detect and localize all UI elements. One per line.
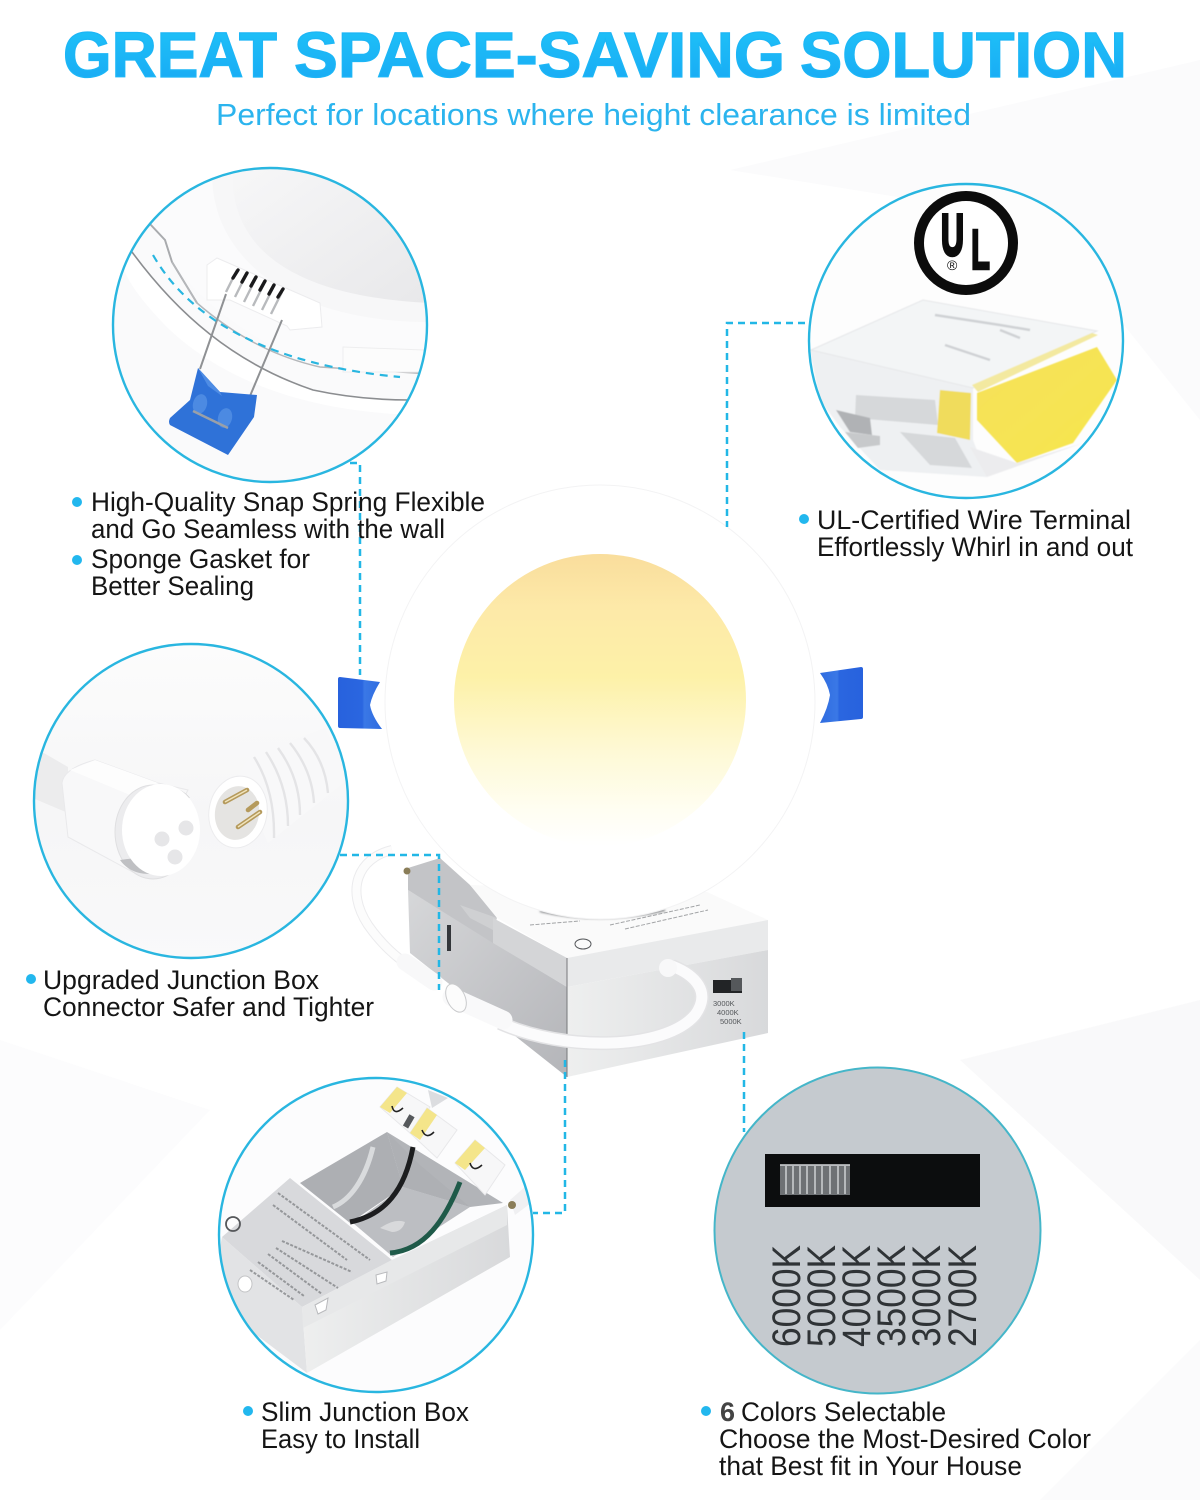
- dashed connector lines: [340, 323, 805, 1213]
- kelvin labels: 3000K: [905, 1245, 949, 1347]
- right plug: [208, 737, 329, 848]
- text block: UL wire terminal: UL-Certified Wire Terminal: [817, 505, 1131, 535]
- label printing: [250, 1193, 370, 1300]
- box faces: [222, 1178, 392, 1307]
- text block: snap spring and gasket: High-Quality Snap Spring Flexible: [91, 487, 485, 517]
- trim line: [132, 252, 410, 400]
- mounting block: [207, 258, 322, 330]
- text block: colours selectable: that Best fit in Your House: [719, 1451, 1022, 1481]
- thin cable: [356, 850, 412, 968]
- ring contact shadow: [540, 910, 665, 918]
- text block: UL wire terminal: Effortlessly Whirl in and out: [817, 532, 1133, 562]
- kelvin labels: 5000K: [800, 1245, 844, 1347]
- text block: snap spring and gasket: [72, 487, 485, 601]
- strips: [493, 918, 567, 987]
- title: SPACE-SAVING: [294, 19, 785, 91]
- panel: slim junction box: [210, 1075, 537, 1397]
- junction box with cable: 3000K: [713, 999, 735, 1008]
- panel: snap spring: [110, 165, 430, 485]
- connector cable: [500, 966, 702, 1043]
- text block: slim junction box: [243, 1397, 469, 1454]
- text block: UL wire terminal: [799, 505, 1133, 562]
- kelvin labels: 4000K: [835, 1245, 879, 1347]
- text block: colours selectable: 6: [720, 1397, 735, 1427]
- title: [63, 19, 1127, 91]
- text block: snap spring and gasket: Sponge Gasket for: [91, 544, 310, 574]
- UL logo: ®: [947, 257, 958, 273]
- wires: [333, 1147, 373, 1207]
- text block: slim junction box: Slim Junction Box: [261, 1397, 469, 1427]
- kelvin labels: 6000K: [765, 1245, 809, 1347]
- junction box with cable: 5000K: [720, 1017, 742, 1026]
- UL logo: [919, 196, 1013, 290]
- kelvin labels: [765, 1245, 985, 1347]
- text block: colours selectable: Choose the Most-Desired Color: [719, 1424, 1091, 1454]
- gray top panel: [408, 858, 497, 943]
- left plug: [30, 745, 200, 879]
- text block: connector: Connector Safer and Tighter: [43, 992, 374, 1022]
- panel: connector: [30, 640, 352, 962]
- text block: colours selectable: [701, 1397, 1091, 1481]
- lit disk: [454, 554, 746, 846]
- wire terminals: [380, 1087, 505, 1195]
- lamp body: [150, 165, 430, 373]
- label print: [530, 905, 708, 929]
- right blue clip: [820, 667, 863, 723]
- text block: snap spring and gasket: Better Sealing: [91, 571, 254, 601]
- spring coil: [226, 270, 282, 314]
- title: SOLUTION: [800, 19, 1127, 91]
- subtitle: Perfect for locations where height clearance is limited: [216, 97, 971, 132]
- terminal body: [810, 300, 1117, 477]
- UL logo: U: [941, 203, 964, 268]
- kelvin labels: 2700K: [941, 1245, 985, 1347]
- panel: UL wire terminal: [805, 180, 1127, 502]
- selector switch: [765, 1154, 980, 1207]
- box interior: [300, 1132, 403, 1223]
- blue clip: [169, 368, 257, 455]
- text block: connector: Upgraded Junction Box: [43, 965, 319, 995]
- ring trim: [385, 485, 815, 919]
- left blue clip: [338, 677, 382, 729]
- text block: connector: [26, 965, 374, 1022]
- text block: snap spring and gasket: and Go Seamless with the wall: [91, 514, 445, 544]
- UL logo: L: [971, 218, 990, 282]
- panel: colour selector: [714, 1068, 1040, 1394]
- left face: [408, 890, 567, 1077]
- yellow tab: [972, 333, 1098, 392]
- dashed arc: [153, 255, 400, 377]
- ring band: [122, 252, 430, 415]
- switch on box: [713, 980, 742, 993]
- title: GREAT: [63, 19, 277, 91]
- kelvin labels: 3500K: [870, 1245, 914, 1347]
- text block: colours selectable: Colors Selectable: [741, 1397, 946, 1427]
- junction box with cable: [356, 850, 768, 1077]
- junction box with cable: 4000K: [717, 1008, 739, 1017]
- text block: slim junction box: Easy to Install: [261, 1424, 420, 1454]
- downlight panel: [338, 485, 863, 919]
- spring wires: [200, 294, 282, 396]
